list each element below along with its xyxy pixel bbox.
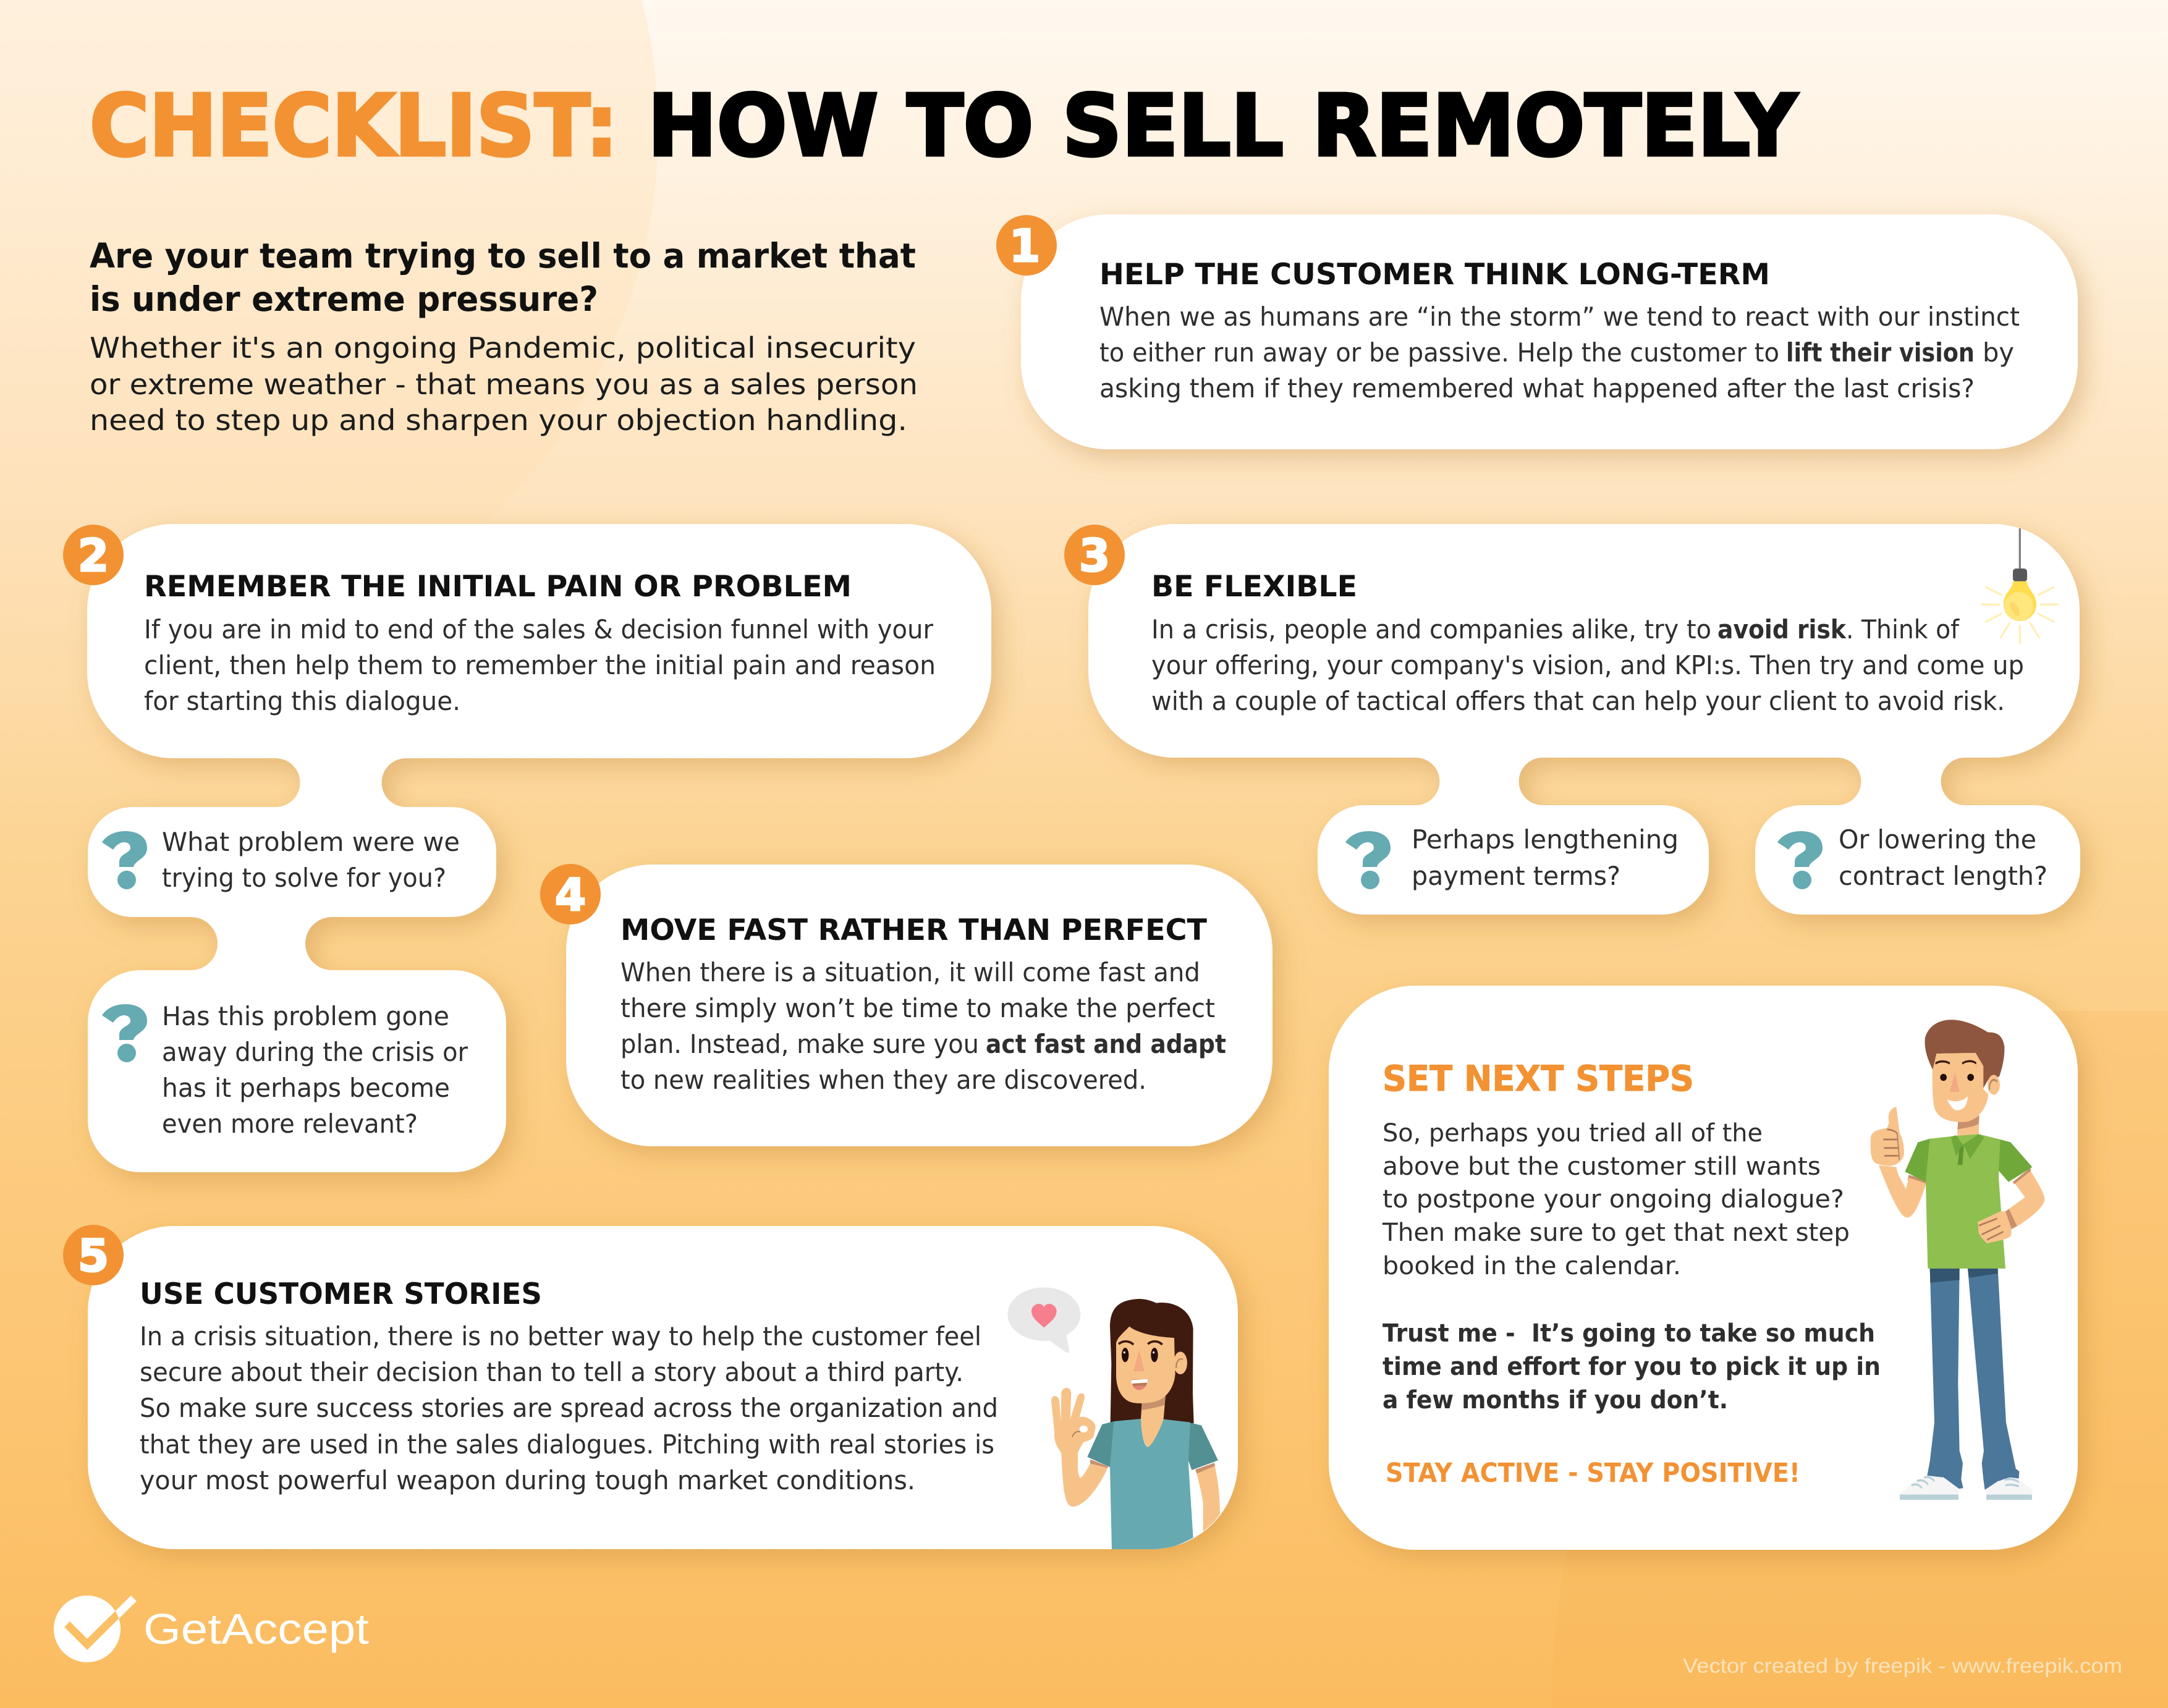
heading: step 5: USE CUSTOMER STORIES (140, 1277, 542, 1311)
bold statement: trust me (1383, 1319, 1881, 1414)
bold statement: trust me: Trust me - It’s going to take so much (1383, 1319, 1875, 1348)
body text: set next steps: to postpone your ongoing dialogue? (1383, 1185, 1844, 1214)
logo wordmark: GetAccept (143, 1605, 369, 1653)
heading: step 1: HELP THE CUSTOMER THINK LONG-TERM (1099, 258, 1770, 292)
panel: step 4 move fast rather than perfect (566, 865, 1272, 1146)
body text: step 4: plan. Instead, make sure you (620, 1029, 979, 1059)
badge: number 3 (1064, 525, 1125, 585)
icon: question mark 3 (1345, 831, 1391, 889)
body text: step 1: to either run away or be passive. Help the customer to (1099, 337, 1779, 368)
body text: step 5 (140, 1321, 998, 1495)
body text: step 3 (1151, 614, 2024, 716)
icon: question mark 4 (1777, 831, 1823, 889)
badge: number 4: 4 (555, 869, 586, 921)
body text: step 2: client, then help them to remember the initial pain and reason (144, 650, 936, 680)
body text: set next steps: booked in the calendar. (1383, 1252, 1681, 1280)
badge: number 2 (63, 525, 124, 585)
credit: Vector created by freepik - www.freepik.com (1683, 1654, 2122, 1677)
body text: step 2: If you are in mid to end of the sales & decision funnel with your (144, 614, 934, 645)
panel: set next steps (1329, 986, 2078, 1550)
intro heading: Are your team trying to sell to a market that (90, 236, 916, 276)
badge: number 5: 5 (78, 1230, 109, 1282)
body text: step 5: your most powerful weapon during tough market conditions. (140, 1465, 915, 1495)
heading: step 3: BE FLEXIBLE (1151, 570, 1357, 604)
body text: step 3: your offering, your company's vision, and KPI:s. Then try and come up (1151, 650, 2024, 680)
icon: light bulb (1982, 528, 2058, 643)
body text: set next steps: So, perhaps you tried all of the (1383, 1119, 1763, 1148)
body text: step 2 (144, 614, 936, 716)
heading: set next steps: SET NEXT STEPS (1383, 1059, 1694, 1099)
question: has this problem gone away: even more relevant? (162, 1109, 418, 1139)
body text: step 4: to new realities when they are discovered. (620, 1065, 1146, 1095)
body text: step 3: . Think of (1846, 614, 1960, 645)
body text: step 3: In a crisis, people and companies alike, try to (1151, 614, 1711, 645)
body text: step 1: by (1983, 337, 2014, 368)
question: perhaps lengthening (1412, 824, 1679, 891)
title: CHECKLIST: (90, 77, 618, 175)
body text: step 5: So make sure success stories are spread across the organization and (140, 1393, 998, 1423)
body text: step 5: In a crisis situation, there is no better way to help the customer feel (140, 1321, 981, 1351)
icon: question mark 1 (102, 831, 147, 889)
badge: number 1 (996, 215, 1057, 276)
question: or lowering: Or lowering the (1839, 824, 2036, 855)
intro text: or extreme weather - that means you as a sales person (90, 368, 918, 401)
body text: step 2: for starting this dialogue. (144, 686, 460, 716)
body text: step 1: When we as humans are “in the storm” we tend to react with our instinct (1099, 302, 2020, 332)
badge: number 5 (63, 1225, 124, 1285)
question: or lowering: contract length? (1839, 861, 2047, 891)
body text: set next steps: Then make sure to get that next step (1382, 1219, 1850, 1247)
icon: speech bubble with heart (1007, 1287, 1080, 1353)
panel: step 1 help the customer think long-term (1021, 214, 2078, 449)
illustration: man giving thumbs up (1871, 1020, 2044, 1500)
question: what problem (162, 827, 460, 893)
question: perhaps lengthening: payment terms? (1412, 861, 1620, 891)
question: perhaps lengthening: Perhaps lengthening (1412, 824, 1679, 855)
body text: step 4: there simply won’t be time to make the perfect (620, 993, 1215, 1023)
badge: number 4 (540, 864, 601, 924)
slogan: STAY ACTIVE - STAY POSITIVE! (1386, 1458, 1800, 1489)
question: what problem: trying to solve for you? (162, 863, 446, 893)
icon: check mark in circle (54, 1596, 137, 1662)
body text: step 1: asking them if they remembered what happened after the last crisis? (1099, 373, 1975, 404)
intro heading (90, 236, 916, 319)
intro text: need to step up and sharpen your objection handling. (90, 404, 907, 437)
body text: step 4 (620, 957, 1226, 1095)
background blob: top left (0, 0, 658, 674)
question: has this problem gone away: Has this problem gone (162, 1001, 449, 1031)
intro text: Whether it's an ongoing Pandemic, political insecurity (90, 331, 916, 365)
question: has this problem gone away (162, 1001, 468, 1139)
body text: step 5: secure about their decision than to tell a story about a third party. (140, 1357, 963, 1387)
badge: number 1: 1 (1009, 220, 1040, 272)
body text: set next steps (1382, 1119, 1850, 1280)
title (90, 77, 1798, 175)
bold statement: trust me: a few months if you don’t. (1383, 1386, 1728, 1414)
body text: step 3: with a couple of tactical offers that can help your client to avoid risk. (1151, 686, 2005, 716)
intro heading: is under extreme pressure? (90, 279, 598, 319)
panel: step 2 remember the initial pain, with question bubbles (87, 524, 991, 1172)
body text: step 5: that they are used in the sales dialogues. Pitching with real stories is (140, 1429, 994, 1460)
body text: step 3: avoid risk (1717, 614, 1847, 645)
body text: set next steps: above but the customer still wants (1383, 1152, 1821, 1181)
badge: number 2: 2 (78, 530, 109, 581)
question: has this problem gone away: has it perhaps become (162, 1073, 450, 1103)
intro text (90, 331, 918, 437)
illustration: woman with speech bubble (1007, 1287, 1220, 1549)
body text: step 4: act fast and adapt (986, 1029, 1226, 1059)
icon: question mark 2 (102, 1004, 147, 1062)
question: or lowering (1839, 824, 2047, 891)
heading: step 2: REMEMBER THE INITIAL PAIN OR PROBLEM (144, 570, 852, 604)
badge: number 3: 3 (1079, 530, 1110, 581)
title: HOW TO SELL REMOTELY (648, 77, 1798, 175)
body text: step 1: lift their vision (1786, 337, 1975, 368)
body text: step 1 (1099, 302, 2020, 404)
body text: step 4: When there is a situation, it will come fast and (620, 957, 1200, 987)
logo: GetAccept (54, 1596, 369, 1662)
question: has this problem gone away: away during the crisis or (162, 1037, 468, 1067)
panel: step 5 use customer stories (88, 1226, 1238, 1549)
bold statement: trust me: time and effort for you to pick it up in (1383, 1353, 1881, 1381)
heading: step 4: MOVE FAST RATHER THAN PERFECT (620, 913, 1207, 947)
background blob: bottom right (1551, 1011, 2168, 1708)
question: what problem: What problem were we (162, 827, 460, 857)
panel: step 3 be flexible, with question bubbles (1088, 524, 2080, 915)
